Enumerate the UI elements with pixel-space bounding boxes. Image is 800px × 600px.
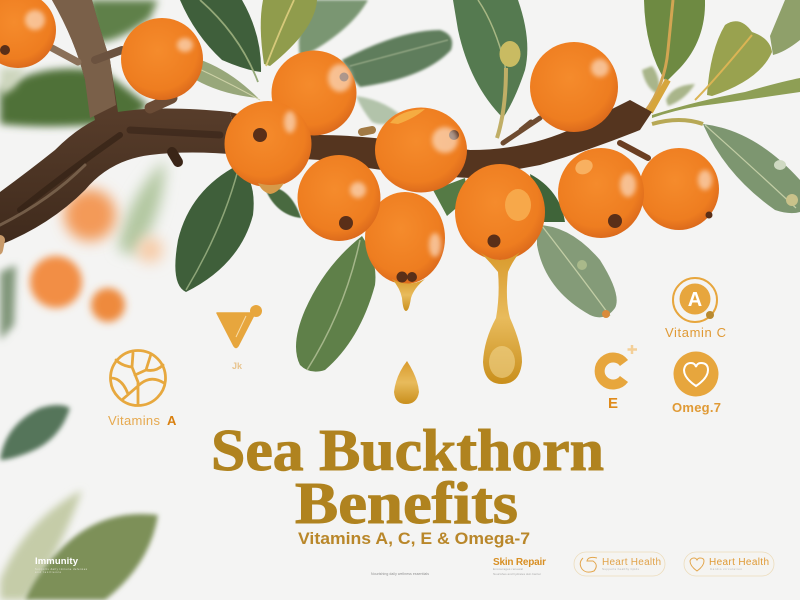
benefit: Skin Repair: Encourages renewal	[493, 567, 523, 571]
benefit pill: Heart Health 1: Heart Health	[602, 557, 661, 568]
blurred background foliage and berries	[0, 0, 165, 600]
label: Vitamin C: Vitamin C	[665, 325, 726, 340]
label: E: E	[608, 395, 618, 412]
icon: triangle	[217, 305, 262, 348]
benefit: Skin Repair: Nourishes and hydrates skin barrier	[493, 572, 541, 576]
label: faint glyph: Jk	[232, 361, 243, 371]
icon: heart badge	[674, 352, 718, 396]
icon: A badge: A	[688, 289, 702, 311]
leaves	[163, 0, 800, 372]
branch	[0, 0, 652, 250]
benefit: Immunity	[35, 556, 88, 574]
benefit pill: Heart Health 2: Heart Health	[709, 557, 769, 568]
leaf: top dark	[180, 0, 261, 82]
benefit: Skin Repair	[493, 557, 546, 576]
benefit pill: Heart Health 1	[574, 552, 665, 576]
benefit: Skin Repair: Skin Repair	[493, 557, 546, 568]
label: Vitamins A: Vitamins	[108, 413, 160, 428]
benefit: Immunity: Immunity	[35, 556, 79, 567]
benefit: Immunity: Supports daily immune defenses	[35, 568, 88, 571]
subtitle: Vitamins A, C, E & Omega-7	[298, 530, 530, 548]
title: Benefits	[295, 470, 518, 536]
title: Sea Buckthorn	[211, 417, 604, 483]
berries	[0, 0, 719, 284]
title	[211, 417, 604, 536]
benefit pill: Heart Health 1: Supports healthy lipids	[602, 567, 640, 571]
benefit pill: Heart Health 2	[684, 552, 774, 576]
icon: C letter	[600, 345, 637, 384]
label: Omeg.7: Omeg.7	[672, 400, 721, 415]
benefit pill: Heart Health 2: Cardio circulation	[710, 567, 742, 571]
oil drops	[258, 41, 798, 404]
footnote: Nourishing daily wellness essentials	[371, 572, 429, 576]
icon: tree of life vitamin A	[110, 350, 166, 406]
benefit: Immunity: and resilience	[35, 571, 62, 574]
label: Vitamins A: A	[167, 413, 177, 428]
icon: A badge	[673, 278, 717, 322]
